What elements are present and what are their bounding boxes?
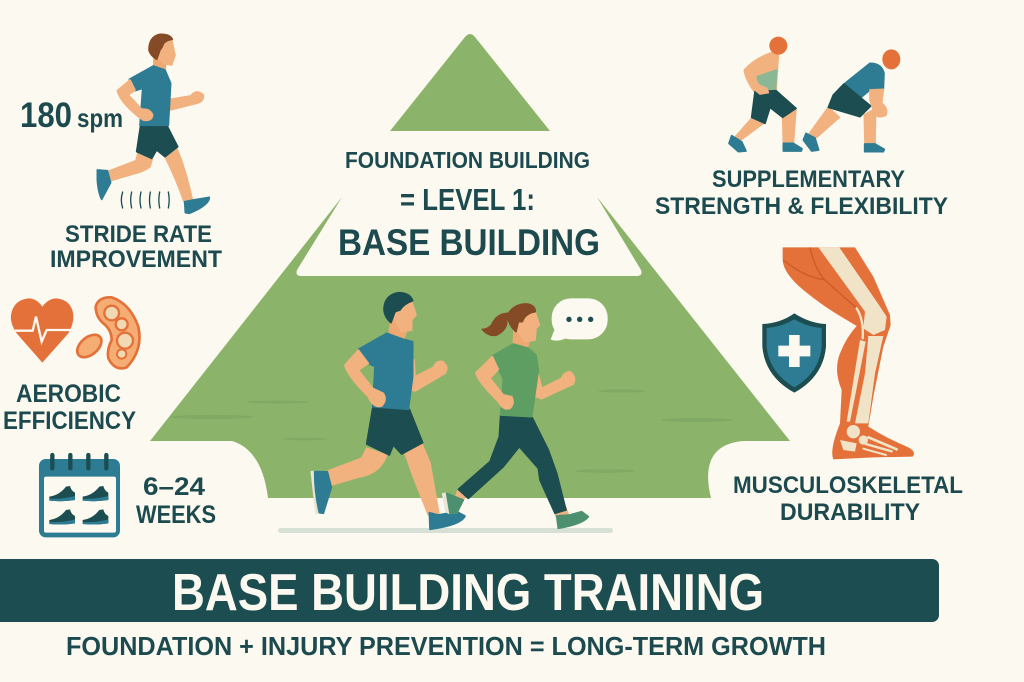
label: stride rate improvement: IMPROVEMENT xyxy=(50,246,222,273)
label: supplementary strength and flexibility xyxy=(655,166,948,220)
label: 6-24 weeks: WEEKS xyxy=(136,501,216,529)
label: musculoskeletal durability: DURABILITY xyxy=(780,499,920,526)
icons: heart and mitochondria xyxy=(11,297,139,368)
bending figure xyxy=(803,49,900,152)
illustration: leg anatomy with shield xyxy=(762,247,914,459)
label: aerobic efficiency xyxy=(3,380,136,435)
icon: calendar with shoes xyxy=(39,455,120,537)
label: aerobic efficiency: AEROBIC xyxy=(16,380,121,408)
label: 6-24 weeks: 6–24 xyxy=(143,473,205,501)
heading: foundation building level 1: FOUNDATION BUILDING xyxy=(345,147,590,173)
female runner xyxy=(443,304,588,528)
icon: medical shield xyxy=(762,313,826,393)
title banner xyxy=(0,559,939,622)
icon: mitochondrion xyxy=(96,297,139,368)
stat: 180 spm xyxy=(20,96,123,135)
icon: heart with pulse xyxy=(11,298,73,363)
title banner: BASE BUILDING TRAINING xyxy=(172,564,764,622)
label: musculoskeletal durability xyxy=(733,472,963,526)
icon: red cell xyxy=(73,330,106,362)
panel: foundation pyramid xyxy=(150,34,790,498)
icon: leg muscles and bones xyxy=(783,247,914,459)
heading: foundation building level 1: = LEVEL 1: xyxy=(400,182,535,217)
subtitle: FOUNDATION + INJURY PREVENTION = LONG-TERM GROWTH xyxy=(66,631,826,661)
illustration: two runners xyxy=(311,293,608,529)
lunging figure xyxy=(729,37,802,152)
pyramid top tier xyxy=(390,34,550,131)
stat: 180 spm: spm xyxy=(77,103,123,133)
illustration: cadence runner xyxy=(97,34,209,213)
heading: foundation building level 1 xyxy=(338,147,600,263)
label: stride rate improvement xyxy=(50,221,222,273)
heading: foundation building level 1: BASE BUILDING xyxy=(338,222,600,263)
label: supplementary strength and flexibility: SUPPLEMENTARY xyxy=(712,166,905,193)
cadence motion marks xyxy=(121,192,169,208)
speech bubble xyxy=(551,298,608,341)
ground line xyxy=(278,528,613,533)
grass marks xyxy=(170,389,733,473)
illustration: strength and flexibility figures xyxy=(729,37,900,152)
label: supplementary strength and flexibility: STRENGTH & FLEXIBILITY xyxy=(655,193,948,220)
stat: 180 spm: 180 xyxy=(20,96,72,135)
label: 6-24 weeks xyxy=(136,473,216,529)
label: stride rate improvement: STRIDE RATE xyxy=(65,221,212,248)
male runner xyxy=(311,293,465,529)
label: musculoskeletal durability: MUSCULOSKELETAL xyxy=(733,472,963,499)
pyramid base tier xyxy=(150,197,790,498)
label: aerobic efficiency: EFFICIENCY xyxy=(3,407,136,435)
